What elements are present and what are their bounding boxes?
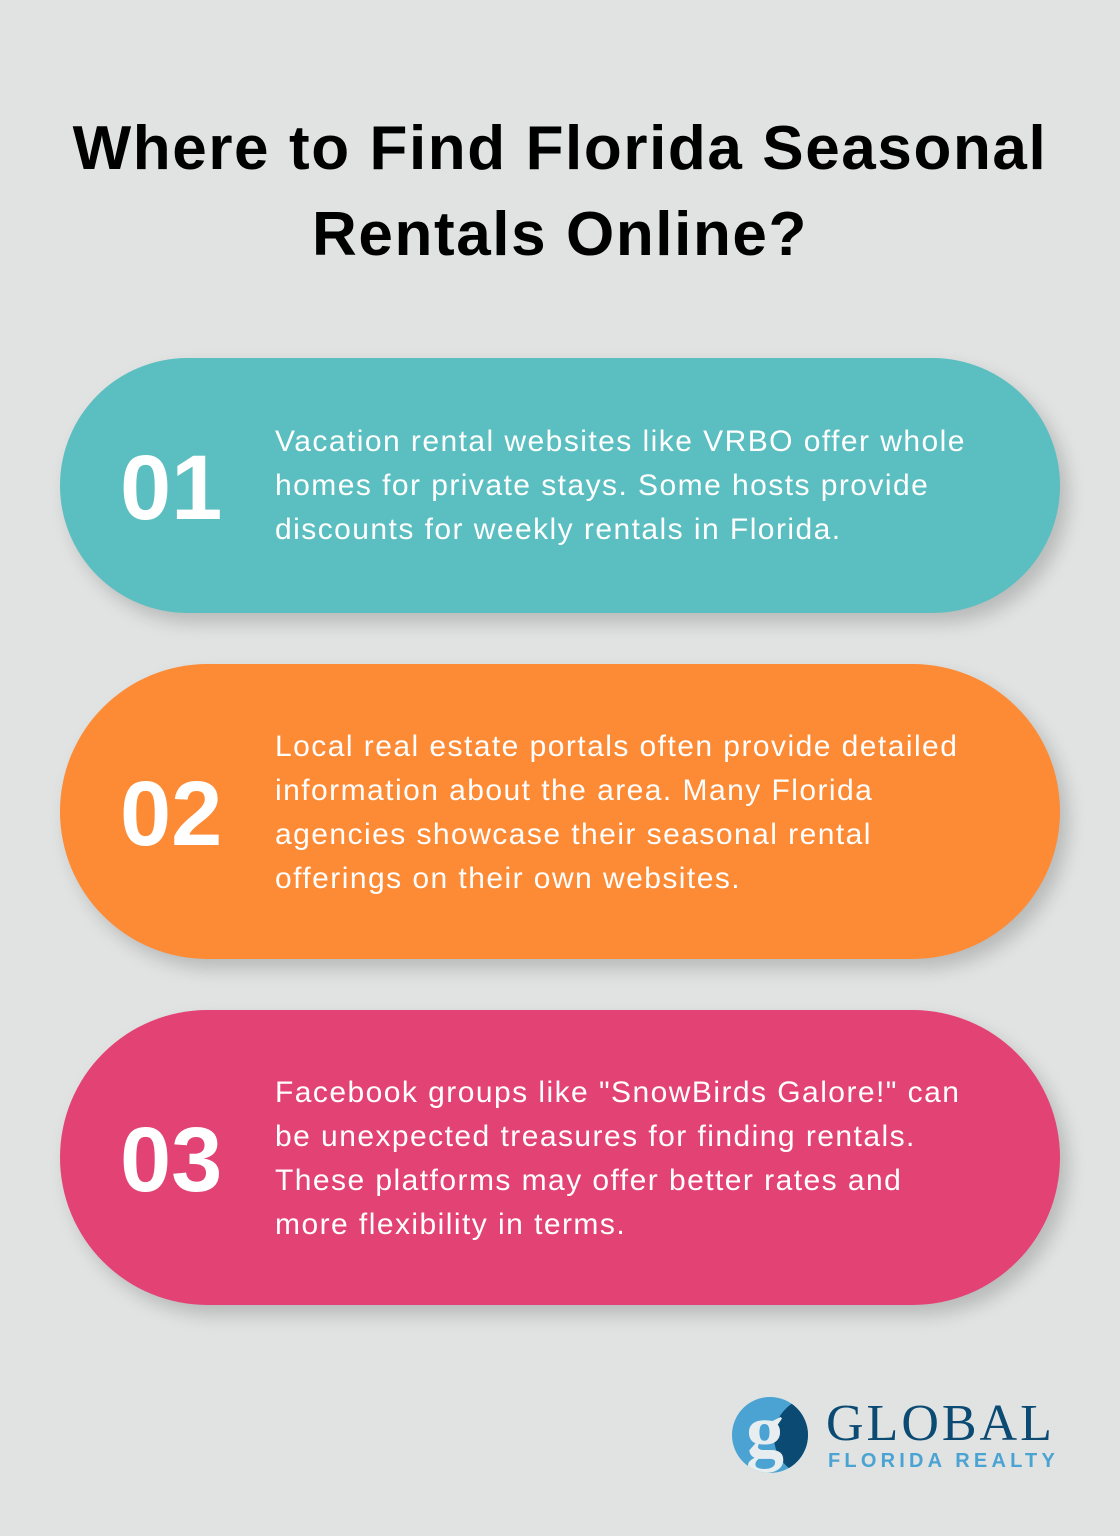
text 01: discounts for weekly rentals in Florida. — [275, 513, 842, 546]
logo — [732, 1395, 1059, 1473]
text 01: Vacation rental websites like VRBO offer whole — [275, 425, 966, 458]
text 01 — [275, 425, 966, 546]
panel: 03 — [60, 1010, 1060, 1305]
logo text: GLOBAL — [826, 1395, 1055, 1452]
text 03: These platforms may offer better rates and — [275, 1164, 902, 1197]
text 02: information about the area. Many Florida — [275, 774, 873, 807]
number 03: 03 — [120, 1109, 222, 1211]
text 02 — [275, 730, 958, 895]
text 03: be unexpected treasures for finding rentals. — [275, 1120, 916, 1153]
title: Rentals Online? — [312, 200, 808, 269]
number 02: 02 — [120, 763, 222, 865]
text 02: Local real estate portals often provide detailed — [275, 730, 958, 763]
icon: g circle — [732, 1397, 808, 1473]
title: Where to Find Florida Seasonal — [73, 114, 1047, 183]
text 01: homes for private stays. Some hosts provide — [275, 469, 929, 502]
number 01: 01 — [120, 437, 222, 539]
panel: 01 — [60, 358, 1060, 613]
text 03 — [275, 1076, 960, 1241]
title — [72, 114, 1047, 269]
text 03: more flexibility in terms. — [275, 1208, 626, 1241]
text 02: offerings on their own websites. — [275, 862, 741, 895]
panel: 02 — [60, 664, 1060, 959]
text 03: Facebook groups like "SnowBirds Galore!" can — [275, 1076, 960, 1109]
text 02: agencies showcase their seasonal rental — [275, 818, 872, 851]
logo: FLORIDA REALTY — [828, 1450, 1059, 1472]
